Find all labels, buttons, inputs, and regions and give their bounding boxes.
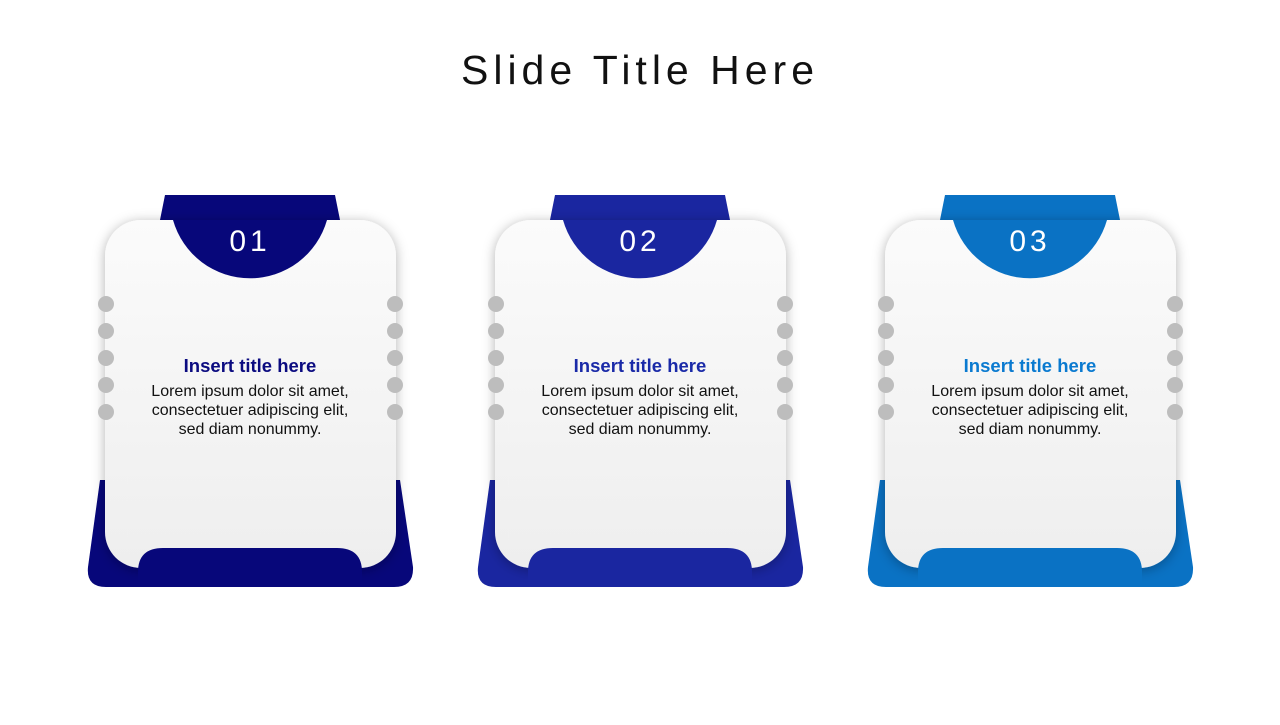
top tab 02 <box>549 195 731 225</box>
number circle 02 <box>563 220 717 278</box>
top tab 01 <box>159 195 341 225</box>
text block 02: Lorem ipsum dolor sit amet, <box>541 383 739 400</box>
text block 02 <box>541 355 739 438</box>
panel: card 01 <box>88 195 413 587</box>
top tab 03 <box>939 195 1121 225</box>
text block 01: Insert title here <box>184 355 316 376</box>
bottom base 01 <box>88 480 413 587</box>
text block 03: consectetuer adipiscing elit, <box>932 402 1128 419</box>
number circle 03 <box>953 220 1107 278</box>
text block 03: sed diam nonummy. <box>959 421 1101 438</box>
text block 01: sed diam nonummy. <box>179 421 321 438</box>
text block 01: consectetuer adipiscing elit, <box>152 402 348 419</box>
text block 03: Lorem ipsum dolor sit amet, <box>931 383 1129 400</box>
bottom tab 01 <box>138 548 362 587</box>
title: Slide Title Here <box>461 47 819 93</box>
white card 01 <box>105 220 396 568</box>
text block 03 <box>931 355 1129 438</box>
text block 02: sed diam nonummy. <box>569 421 711 438</box>
text block 01 <box>151 355 349 438</box>
white card 02 <box>495 220 786 568</box>
text block 02: consectetuer adipiscing elit, <box>542 402 738 419</box>
number circle 03: 03 <box>1009 225 1051 258</box>
bottom tab 03 <box>918 548 1142 587</box>
number circle 01: 01 <box>229 225 271 258</box>
text block 01: Lorem ipsum dolor sit amet, <box>151 383 349 400</box>
number circle 02: 02 <box>619 225 661 258</box>
bottom base 03 <box>868 480 1193 587</box>
white card 03 <box>885 220 1176 568</box>
bottom tab 02 <box>528 548 752 587</box>
panel: card 02 <box>478 195 803 587</box>
panel: card 03 <box>868 195 1193 587</box>
text block 03: Insert title here <box>964 355 1096 376</box>
text block 02: Insert title here <box>574 355 706 376</box>
number circle 01 <box>173 220 327 278</box>
bottom base 02 <box>478 480 803 587</box>
